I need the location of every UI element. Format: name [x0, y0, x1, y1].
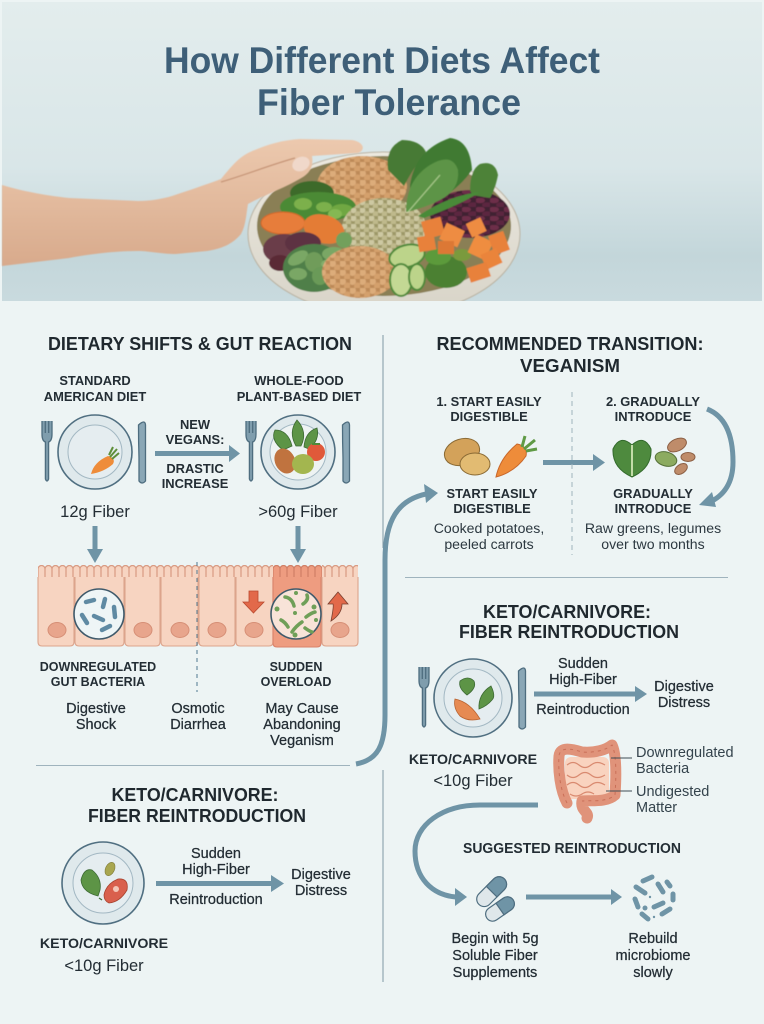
- arrow: long curve to veganism transition: [356, 484, 438, 764]
- label: new vegans: VEGANS:: [166, 432, 224, 447]
- orange squash cubes: [417, 217, 510, 283]
- carrot slices: [260, 210, 345, 244]
- label: begin with 5g: [451, 931, 539, 981]
- title: Fiber Tolerance: [257, 82, 521, 123]
- villi of overloaded cell: [273, 565, 322, 579]
- label: digestive distress: Digestive: [291, 867, 351, 883]
- icon: microbiome cluster: [635, 877, 673, 919]
- text: raw greens: [585, 520, 721, 552]
- label: digestive shock: Digestive: [66, 701, 126, 717]
- label: new vegans: [166, 417, 224, 447]
- label: digestive distress right: Digestive: [654, 679, 714, 695]
- label: whole-food plant-based diet: PLANT-BASED DIET: [237, 389, 361, 404]
- label: digestive distress right: Distress: [658, 695, 710, 711]
- finger crease: [221, 158, 295, 182]
- icon: red down arrow: [243, 591, 264, 613]
- label: gradually introduce: GRADUALLY: [613, 486, 693, 501]
- heading: keto right: FIBER REINTRODUCTION: [459, 622, 679, 642]
- icon: potatoes: [441, 434, 490, 475]
- hand resting on bowl: [2, 139, 363, 266]
- text: cooked potatoes: [434, 520, 544, 552]
- kidney beans: [430, 190, 510, 238]
- label: keto carnivore fiber right: KETO/CARNIVORE: [409, 752, 537, 768]
- label: undigested matter: [636, 784, 709, 816]
- fiber amount: 12g: 12g Fiber: [60, 503, 130, 521]
- label: osmotic diarrhea: Osmotic: [171, 701, 225, 717]
- villi right: [322, 565, 358, 579]
- icon: carrot: [496, 436, 537, 477]
- icon: beans: [654, 435, 695, 477]
- step 2 label: INTRODUCE: [615, 409, 692, 424]
- label: rebuild microbiome: Rebuild: [628, 931, 678, 947]
- label: sudden high-fiber right: Sudden: [558, 656, 608, 672]
- icon: red up arrow: [328, 592, 348, 621]
- label: whole-food plant-based diet: WHOLE-FOOD: [254, 373, 344, 388]
- label: keto carnivore fiber: KETO/CARNIVORE: [40, 936, 168, 952]
- icon: overloaded bacteria: [271, 589, 321, 639]
- bowl of plant foods: [248, 138, 520, 316]
- icon: keto plate right: [419, 659, 526, 737]
- panel: keto carnivore reintroduction left: [40, 785, 351, 975]
- right horizontal divider: [405, 576, 728, 578]
- label: sudden overload: OVERLOAD: [261, 675, 331, 689]
- icon: plate with carrot: [42, 415, 146, 489]
- icon: fiber capsules: [474, 874, 517, 924]
- cells: [38, 577, 358, 647]
- label: reintroduction right: Reintroduction: [536, 702, 630, 718]
- label: keto carnivore fiber right: [409, 752, 537, 790]
- broccoli: [425, 249, 471, 288]
- gut lining diagram: [38, 565, 358, 647]
- arrow: keto left: [156, 875, 284, 892]
- edamame lower: [283, 232, 352, 292]
- chickpeas lower: [322, 246, 398, 298]
- label: downregulated gut bacteria: GUT BACTERIA: [51, 675, 145, 689]
- text: raw greens: over two months: [601, 536, 705, 552]
- panel: keto carnivore reintroduction right: [409, 602, 734, 981]
- label: undigested matter: Matter: [636, 800, 677, 816]
- arrow: capsules to microbiome: [526, 889, 622, 905]
- label: sudden high-fiber right: High-Fiber: [549, 672, 617, 688]
- label: downregulated bacteria: [636, 745, 734, 777]
- arm and hand: [2, 139, 363, 266]
- label: sudden high-fiber: [182, 846, 250, 878]
- label: downregulated gut bacteria: [40, 660, 156, 689]
- arrow: curve from step 2: [699, 409, 733, 507]
- label: drastic increase: [162, 461, 229, 491]
- label: may cause abandoning veganism: [263, 701, 341, 749]
- hero backdrop: [2, 2, 762, 301]
- label: rebuild microbiome: [616, 931, 690, 981]
- chickpeas top: [317, 156, 408, 206]
- icon: plate with plant foods: [246, 415, 350, 489]
- icon: leafy greens: [613, 440, 651, 477]
- label: start easily digestible: DIGESTIBLE: [453, 501, 531, 516]
- step 1 label: 1. START EASILY: [436, 394, 542, 409]
- hero photo: [2, 2, 762, 316]
- step 1 label: [436, 394, 542, 424]
- title: How Different Diets Affect: [164, 40, 600, 81]
- step 2 label: 2. GRADUALLY: [606, 394, 700, 409]
- lentils: [342, 198, 426, 258]
- vertical divider upper: [382, 335, 384, 548]
- broccoli and edamame: [280, 181, 356, 222]
- label: standard american diet: AMERICAN DIET: [44, 389, 146, 404]
- label: drastic increase: INCREASE: [162, 476, 229, 491]
- heading: recommended transition: [436, 334, 704, 376]
- text: cooked potatoes: Cooked potatoes,: [434, 520, 544, 536]
- label: downregulated gut bacteria: DOWNREGULATED: [40, 660, 156, 674]
- label: digestive shock: Shock: [76, 717, 117, 733]
- label: sudden high-fiber right: [549, 656, 617, 688]
- label: digestive distress right: [654, 679, 714, 711]
- fiber amount: over 60g: >60g Fiber: [258, 503, 338, 521]
- vertical divider lower: [382, 770, 384, 982]
- label: digestive distress: [291, 867, 351, 899]
- callout lines: [606, 758, 632, 791]
- heading: keto left: KETO/CARNIVORE:: [112, 785, 278, 805]
- label: may cause abandoning veganism: Veganism: [270, 733, 334, 749]
- villi: [38, 565, 273, 579]
- label: reintroduction: Reintroduction: [169, 892, 263, 908]
- bowl body: [248, 152, 520, 316]
- label: undigested matter: Undigested: [636, 784, 709, 800]
- label: keto carnivore fiber right: <10g Fiber: [433, 772, 513, 790]
- dark roasted beet: [263, 232, 321, 271]
- arrow: step 1 to 2: [543, 454, 605, 471]
- label: whole-food plant-based diet: [237, 373, 361, 404]
- left horizontal divider: [36, 764, 350, 766]
- text: raw greens: Raw greens, legumes: [585, 520, 721, 536]
- heading: keto left: FIBER REINTRODUCTION: [88, 806, 306, 826]
- label: digestive distress: Distress: [295, 883, 347, 899]
- icon: large intestine: [559, 745, 616, 818]
- panel: dietary shifts and gut reaction: [38, 334, 361, 749]
- nuclei: [48, 622, 349, 638]
- text: cooked potatoes: peeled carrots: [444, 536, 534, 552]
- bowl interior: [257, 156, 511, 296]
- label: begin with 5g: Begin with 5g: [451, 931, 539, 947]
- label: downregulated bacteria: Bacteria: [636, 761, 690, 777]
- arrow: curve to suggested reintroduction: [415, 805, 538, 906]
- heading: recommended transition: VEGANISM: [520, 356, 620, 376]
- arrow: down right: [290, 526, 306, 563]
- arrow: new vegans: [155, 445, 240, 462]
- title: [164, 40, 600, 123]
- label: begin with 5g: Soluble Fiber: [452, 948, 538, 964]
- heading: keto left: [88, 785, 306, 826]
- label: new vegans: NEW: [180, 417, 211, 432]
- label: sudden high-fiber: High-Fiber: [182, 862, 250, 878]
- label: rebuild microbiome: slowly: [633, 965, 673, 981]
- label: gradually introduce: INTRODUCE: [615, 501, 692, 516]
- step 1 label: DIGESTIBLE: [450, 409, 528, 424]
- label: standard american diet: [44, 373, 146, 404]
- label: sudden overload: SUDDEN: [270, 660, 322, 674]
- step 2 label: [606, 394, 700, 424]
- label: start easily digestible: [447, 486, 538, 516]
- thumb nail: [290, 154, 312, 174]
- label: gradually introduce: [613, 486, 693, 516]
- arrow: keto right: [534, 686, 647, 702]
- label: keto carnivore fiber: <10g Fiber: [64, 957, 144, 975]
- label: digestive shock: [66, 701, 126, 733]
- heading: suggested reintroduction: SUGGESTED REINTRODUCTION: [463, 841, 681, 857]
- dashed separator: [571, 392, 573, 555]
- arrow: down left: [87, 526, 103, 563]
- label: sudden overload: [261, 660, 331, 689]
- label: start easily digestible: START EASILY: [447, 486, 538, 501]
- panel: recommended transition veganism: [434, 334, 733, 555]
- heading: keto right: KETO/CARNIVORE:: [483, 602, 651, 622]
- label: downregulated bacteria: Downregulated: [636, 745, 734, 761]
- label: may cause abandoning veganism: May Cause: [265, 701, 339, 717]
- cucumber slices: [387, 241, 427, 296]
- label: may cause abandoning veganism: Abandoning: [263, 717, 341, 733]
- label: osmotic diarrhea: Diarrhea: [170, 717, 227, 733]
- center dashed separator: [196, 562, 198, 692]
- heading: keto right: [459, 602, 679, 642]
- spinach leaves: [388, 138, 498, 218]
- heading: dietary shifts: DIETARY SHIFTS & GUT REACTION: [48, 334, 352, 354]
- label: keto carnivore fiber: [40, 936, 168, 975]
- label: drastic increase: DRASTIC: [166, 461, 224, 476]
- heading: recommended transition: RECOMMENDED TRANSITION:: [436, 334, 704, 354]
- label: osmotic diarrhea: [170, 701, 227, 733]
- icon: sparse bacteria: [74, 589, 124, 639]
- label: begin with 5g: Supplements: [453, 965, 537, 981]
- label: rebuild microbiome: microbiome: [616, 948, 690, 964]
- icon: keto plate: [62, 842, 144, 924]
- label: standard american diet: STANDARD: [59, 373, 131, 388]
- label: sudden high-fiber: Sudden: [191, 846, 241, 862]
